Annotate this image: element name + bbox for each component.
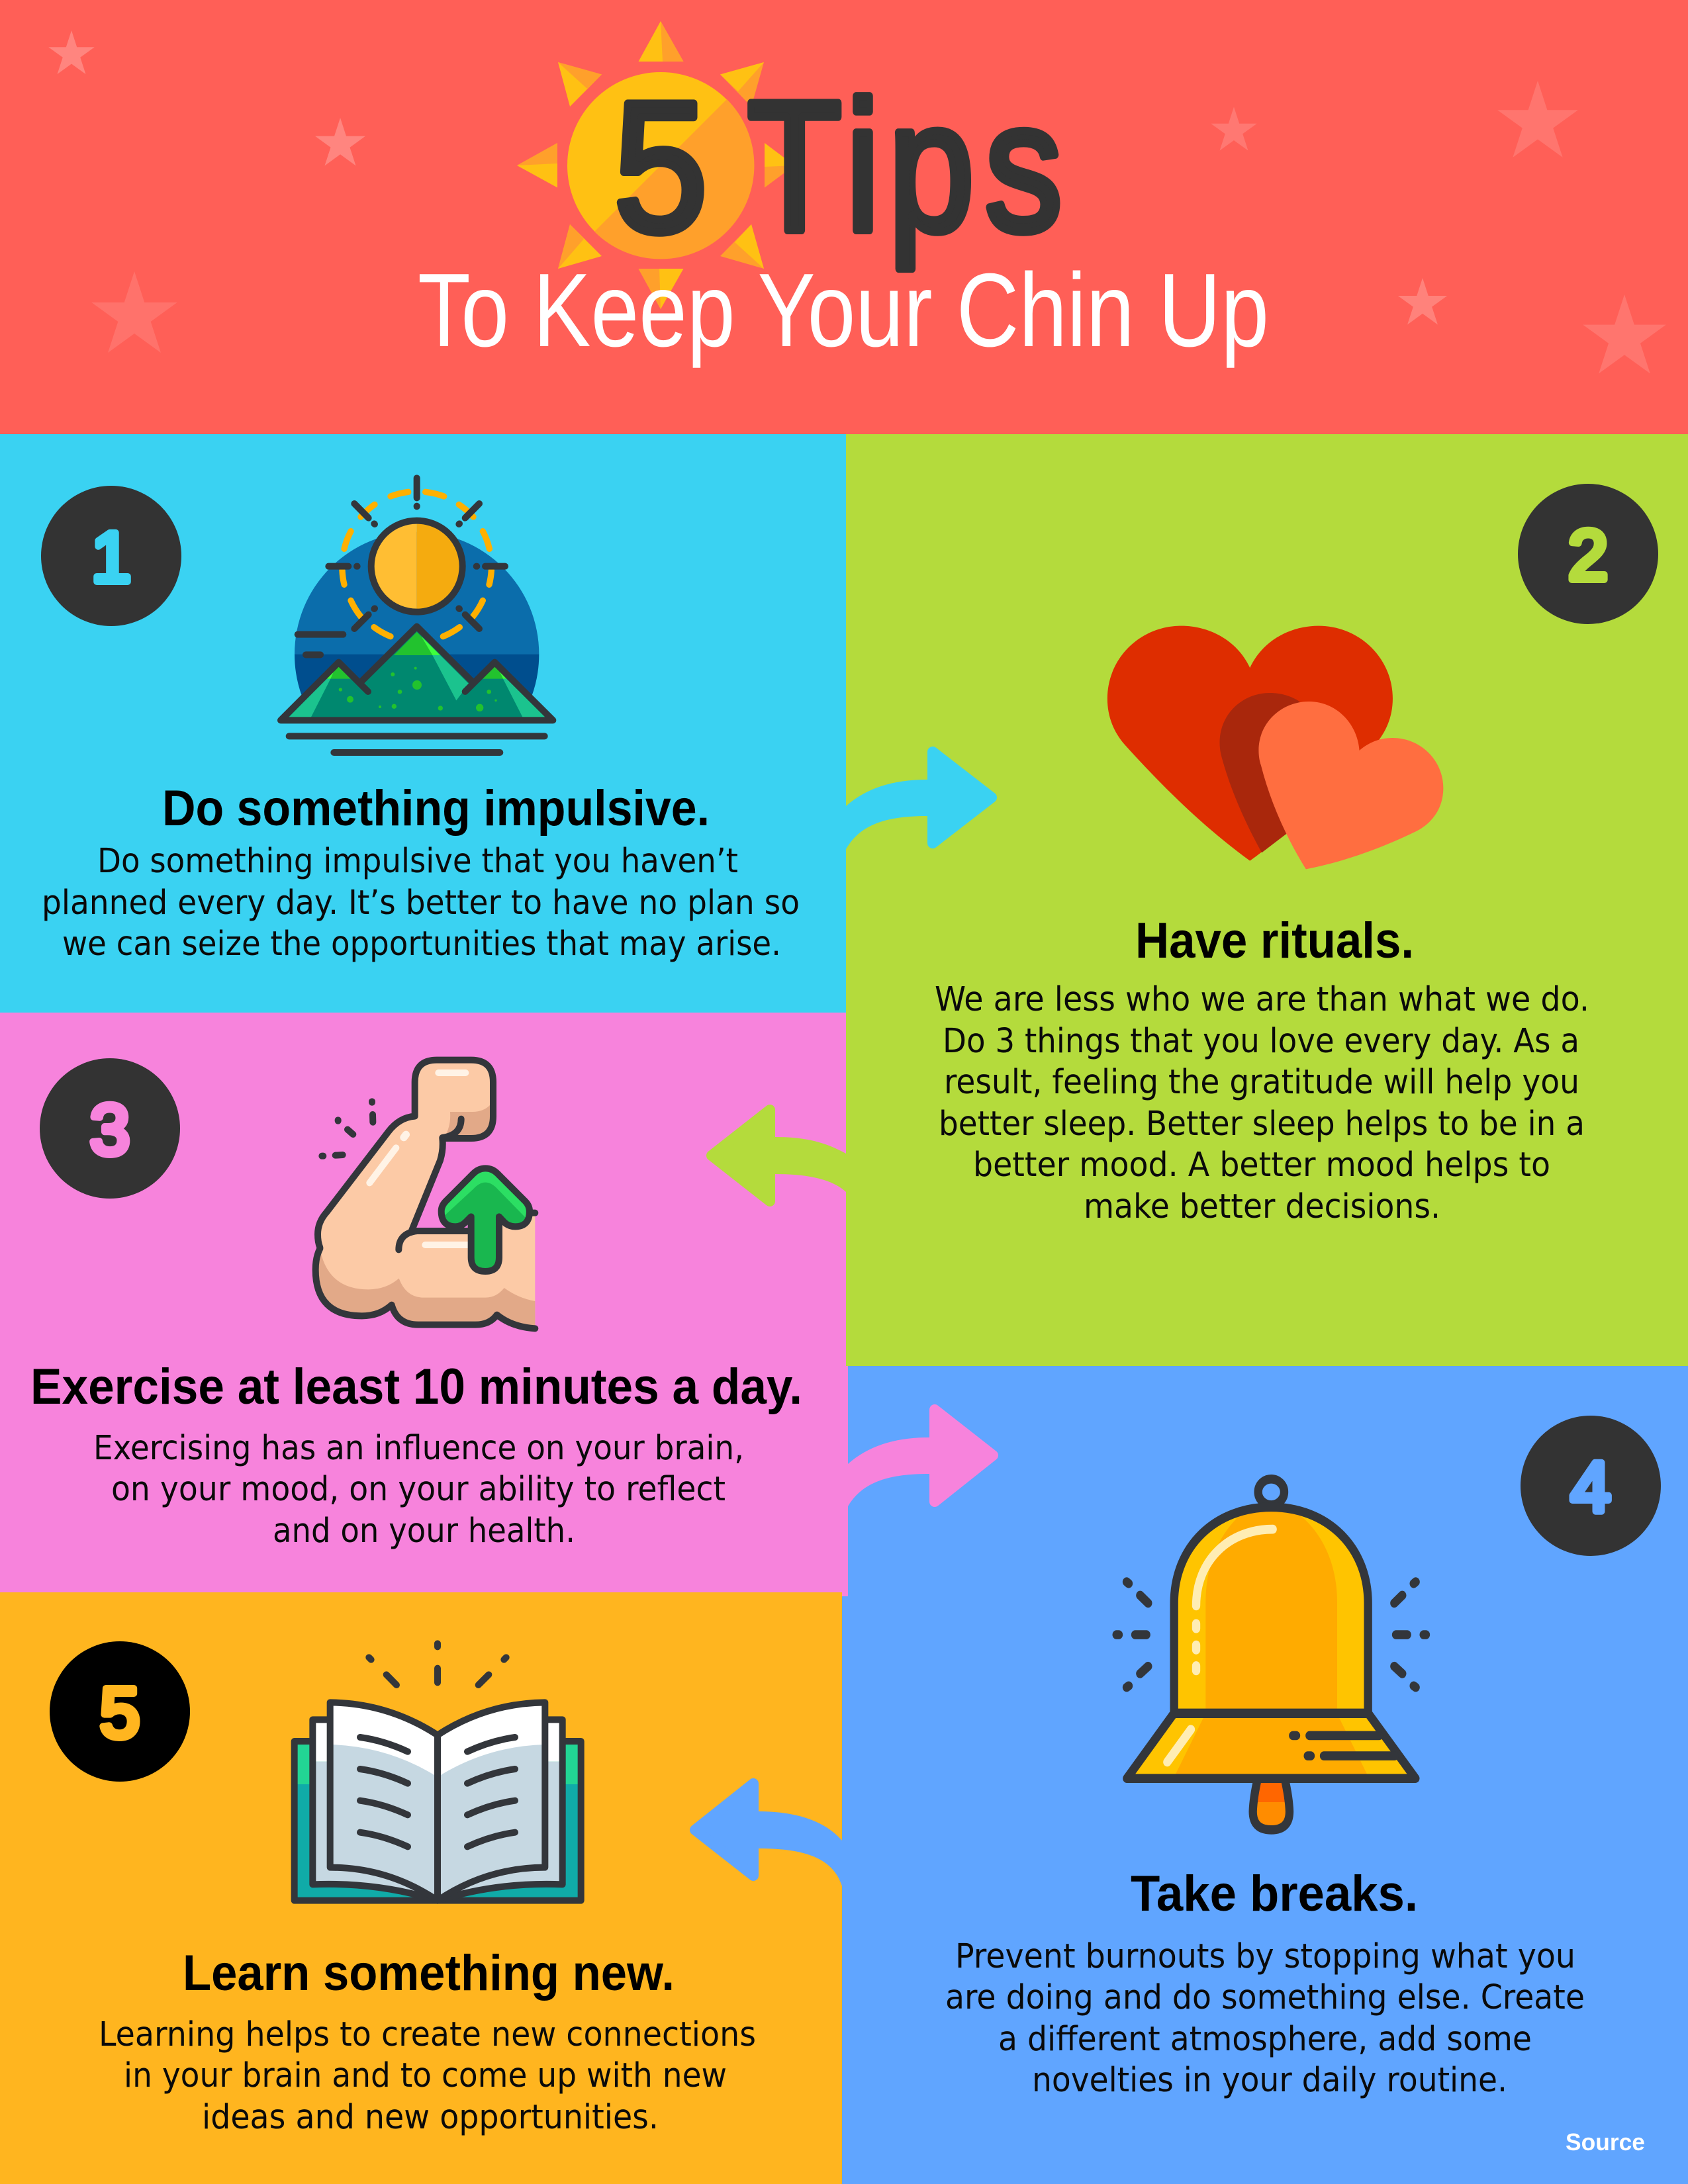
badge 2: 2 — [1568, 515, 1608, 595]
badge 5: 5 — [100, 1672, 140, 1752]
badge 1 — [41, 486, 181, 626]
panel 3: exercise — [0, 1013, 848, 1596]
body 4 — [945, 1937, 1585, 2100]
icon: open book — [295, 1643, 581, 1901]
arrow: step 3 to 4 — [843, 1410, 993, 1506]
body 4: novelties in your daily routine. — [1032, 2061, 1507, 2100]
body 4: a different atmosphere, add some — [998, 2020, 1532, 2059]
body 4: are doing and do something else. Create — [945, 1978, 1585, 2017]
heading 3: Exercise at least 10 minutes a day. — [30, 1359, 802, 1415]
heading 4: Take breaks. — [1131, 1866, 1418, 1922]
body 1 — [42, 842, 800, 964]
arrow: step 4 to 5 — [695, 1784, 847, 1886]
panel 4: take breaks — [842, 1366, 1688, 2184]
body 2: better sleep. Better sleep helps to be in a — [939, 1105, 1585, 1144]
icon: sun — [517, 21, 794, 309]
body 5: ideas and new opportunities. — [202, 2098, 659, 2137]
heading 2: Have rituals. — [1135, 913, 1414, 969]
source link: Source — [1566, 2128, 1645, 2156]
body 2: make better decisions. — [1084, 1187, 1440, 1226]
body 5 — [99, 2015, 756, 2137]
badge 4: 4 — [1571, 1447, 1611, 1527]
panel 1: do something impulsive — [0, 434, 846, 1013]
body 2 — [935, 980, 1589, 1226]
icon: flexed arm with up arrow — [316, 1060, 535, 1328]
arrow: step 1 to 2 — [841, 752, 992, 849]
body 2: Do 3 things that you love every day. As a — [943, 1022, 1579, 1061]
body 3 — [93, 1429, 744, 1551]
title: 5 Tips: Tips — [747, 63, 1062, 271]
body 2: result, feeling the gratitude will help you — [944, 1063, 1579, 1102]
body 4: Prevent burnouts by stopping what you — [955, 1937, 1575, 1976]
body 2: We are less who we are than what we do. — [935, 980, 1589, 1019]
icon: sun over mountains — [281, 478, 553, 752]
header panel — [0, 0, 1688, 434]
panel 2: have rituals — [846, 434, 1688, 1366]
body 1: planned every day. It’s better to have no plan so — [42, 884, 800, 923]
decorative stars — [48, 30, 1666, 373]
arrow: step 2 to 3 — [712, 1110, 851, 1201]
body 3: and on your health. — [273, 1512, 575, 1551]
body 3: Exercising has an influence on your brain, — [93, 1429, 744, 1468]
icon: two hearts — [1107, 626, 1443, 869]
heading 5: Learn something new. — [183, 1945, 675, 2001]
badge 5 — [50, 1641, 190, 1782]
badge 3: 3 — [90, 1089, 130, 1169]
body 3: on your mood, on your ability to reflect — [111, 1470, 726, 1509]
heading 1: Do something impulsive. — [162, 780, 710, 837]
body 2: better mood. A better mood helps to — [973, 1146, 1550, 1185]
title: 5 Tips — [614, 63, 1062, 271]
panel 5: learn something new — [0, 1592, 842, 2184]
icon: bell — [1117, 1479, 1426, 1830]
badge 2 — [1518, 484, 1658, 624]
badge 4 — [1521, 1416, 1661, 1556]
badge 1: 1 — [91, 517, 131, 597]
body 5: in your brain and to come up with new — [124, 2056, 727, 2095]
body 1: Do something impulsive that you haven’t — [97, 842, 738, 881]
body 5: Learning helps to create new connections — [99, 2015, 756, 2054]
subtitle: To Keep Your Chin Up — [418, 252, 1269, 369]
badge 3 — [40, 1058, 180, 1199]
body 1: we can seize the opportunities that may arise. — [62, 925, 781, 964]
title: 5 Tips: 5 — [614, 64, 708, 271]
